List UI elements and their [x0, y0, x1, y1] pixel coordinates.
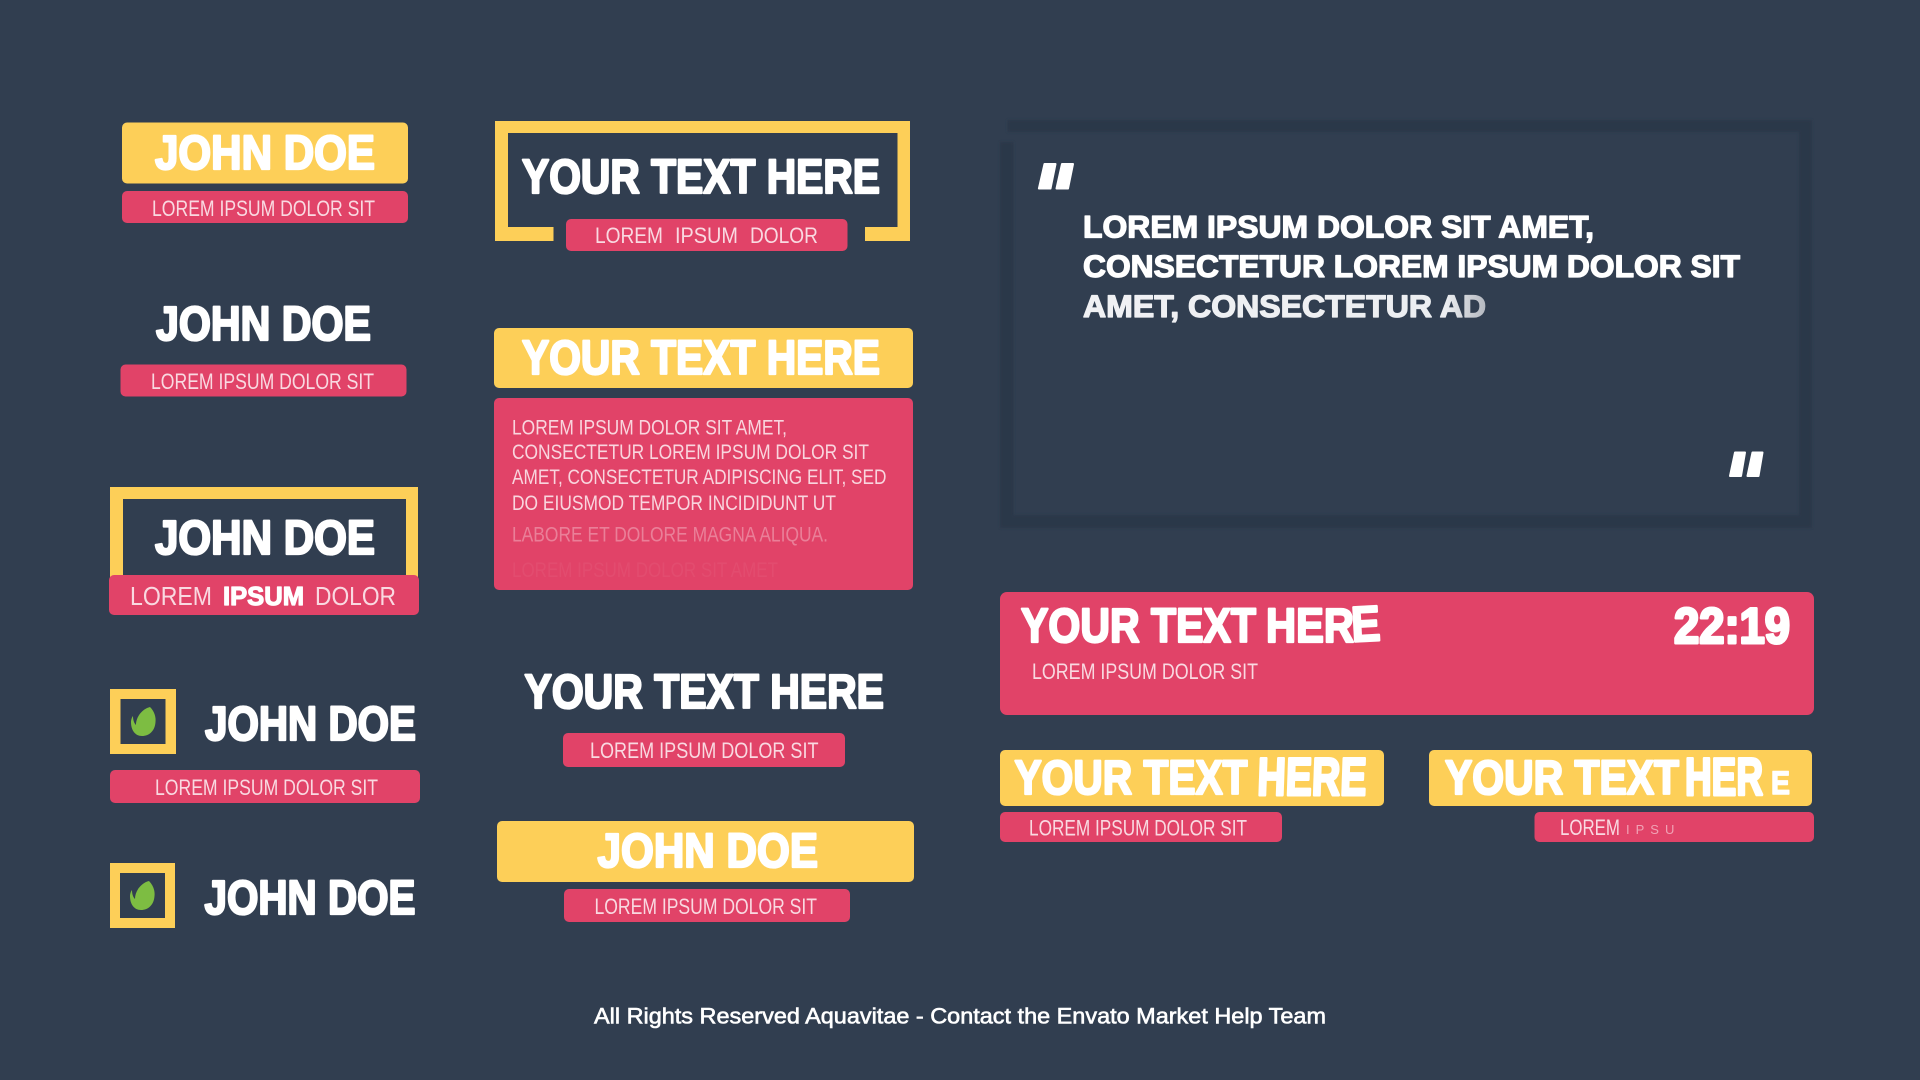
name text: JOHN DOE: [205, 698, 416, 751]
paragraph line 3: AMET, CONSECTETUR ADIPISCING ELIT, SED: [512, 466, 886, 489]
subtitle text: LOREM IPSUM DOLOR SIT: [155, 775, 378, 800]
name text: JOHN DOE: [204, 872, 416, 925]
headline text: YOUR TEXT HERE: [522, 332, 880, 385]
name text: JOHN DOE: [156, 298, 371, 351]
icon: leaf: [131, 707, 156, 736]
icon: opening quote: [1039, 164, 1073, 188]
subtitle word: DOLOR: [315, 581, 396, 611]
paragraph box: [494, 398, 913, 590]
paragraph line 4: DO EIUSMOD TEMPOR INCIDIDUNT UT: [512, 492, 836, 515]
panel: yellow name title: [122, 122, 408, 223]
subtitle fading letters: IPSU: [1626, 822, 1680, 837]
headline text: YOUR TEXT: [1014, 752, 1248, 805]
headline small letter: E: [1771, 765, 1790, 801]
subtitle text: LOREM IPSUM DOLOR SIT: [152, 196, 375, 221]
subtitle bar: [564, 889, 850, 922]
subtitle bar: [120, 364, 406, 396]
yellow frame: [110, 487, 418, 590]
panel: logo title: [110, 863, 416, 928]
panel: yellow headline right: [1429, 748, 1814, 842]
icon: closing quote: [1730, 452, 1762, 476]
panel: plain headline: [524, 666, 884, 767]
panel: yellow headline left: [1000, 748, 1384, 842]
name text: JOHN DOE: [155, 127, 375, 180]
subtitle text: LOREM IPSUM DOLOR SIT: [1032, 659, 1258, 684]
headline bar: [494, 328, 913, 388]
subtitle word: IPSUM: [675, 223, 738, 248]
panel: centered yellow name: [497, 821, 914, 922]
quote line 2: CONSECTETUR LOREM IPSUM DOLOR SIT: [1083, 248, 1740, 284]
panel: quote box: [1000, 120, 1812, 528]
headline distorted letter: E: [1350, 595, 1382, 653]
headline text: YOUR TEXT: [1445, 752, 1679, 805]
headline text: YOUR TEXT: [1021, 600, 1256, 653]
clock text: 22:19: [1674, 598, 1790, 654]
yellow bracket frame: [495, 121, 910, 241]
subtitle bar: [1534, 812, 1814, 842]
subtitle bold word: IPSUM: [223, 581, 304, 611]
headline distorted word: HERE: [1257, 748, 1368, 807]
pink box: [1000, 592, 1814, 715]
name bar: [497, 821, 914, 882]
headline bar: [1429, 750, 1812, 806]
subtitle word: DOLOR: [750, 223, 818, 248]
dark frame: [1000, 120, 1812, 528]
name bar: [122, 122, 408, 184]
panel: framed name title: [109, 487, 419, 615]
panel: logo title with subtitle: [110, 689, 420, 803]
panel: pink headline with clock: [1000, 592, 1814, 715]
icon: leaf: [130, 881, 155, 910]
logo square: [110, 863, 175, 928]
subtitle bar: [122, 191, 408, 223]
logo square: [110, 689, 176, 754]
panel: bracket headline: [495, 121, 910, 251]
paragraph line 5: LABORE ET DOLORE MAGNA ALIQUA.: [512, 524, 828, 546]
subtitle word: LOREM: [130, 581, 212, 611]
headline distorted word: HER: [1685, 748, 1763, 807]
footer credit: All Rights Reserved Aquavitae - Contact the Envato Market Help Team: [594, 1004, 1326, 1028]
headline text: YOUR TEXT HERE: [524, 666, 884, 719]
subtitle text: LOREM IPSUM DOLOR SIT: [1029, 816, 1247, 840]
name text: JOHN DOE: [155, 512, 375, 565]
subtitle bar: [566, 219, 848, 251]
paragraph line 2: CONSECTETUR LOREM IPSUM DOLOR SIT: [512, 441, 869, 464]
quote line 1: LOREM IPSUM DOLOR SIT AMET,: [1083, 208, 1594, 244]
subtitle text: LOREM IPSUM DOLOR SIT: [594, 894, 817, 919]
subtitle bar: [1000, 812, 1282, 842]
quote line 3: AMET, CONSECTETUR AD: [1083, 288, 1486, 324]
subtitle text: LOREM IPSUM DOLOR SIT: [590, 738, 818, 763]
headline bar: [1000, 750, 1384, 806]
subtitle bar: [563, 733, 845, 767]
subtitle word: LOREM: [1560, 815, 1620, 840]
subtitle text: LOREM IPSUM DOLOR SIT: [151, 369, 374, 394]
panel: plain name title: [120, 298, 406, 396]
paragraph line 6: LOREM IPSUM DOLOR SIT AMET: [512, 559, 778, 582]
headline distorted word: HER: [1266, 600, 1354, 653]
subtitle bar: [109, 575, 419, 615]
subtitle word: LOREM: [595, 223, 663, 248]
name text: JOHN DOE: [598, 825, 818, 878]
paragraph line 1: LOREM IPSUM DOLOR SIT AMET,: [512, 416, 787, 440]
headline text: YOUR TEXT HERE: [522, 151, 880, 204]
subtitle bar: [110, 770, 420, 803]
panel: headline with paragraph: [494, 328, 913, 590]
